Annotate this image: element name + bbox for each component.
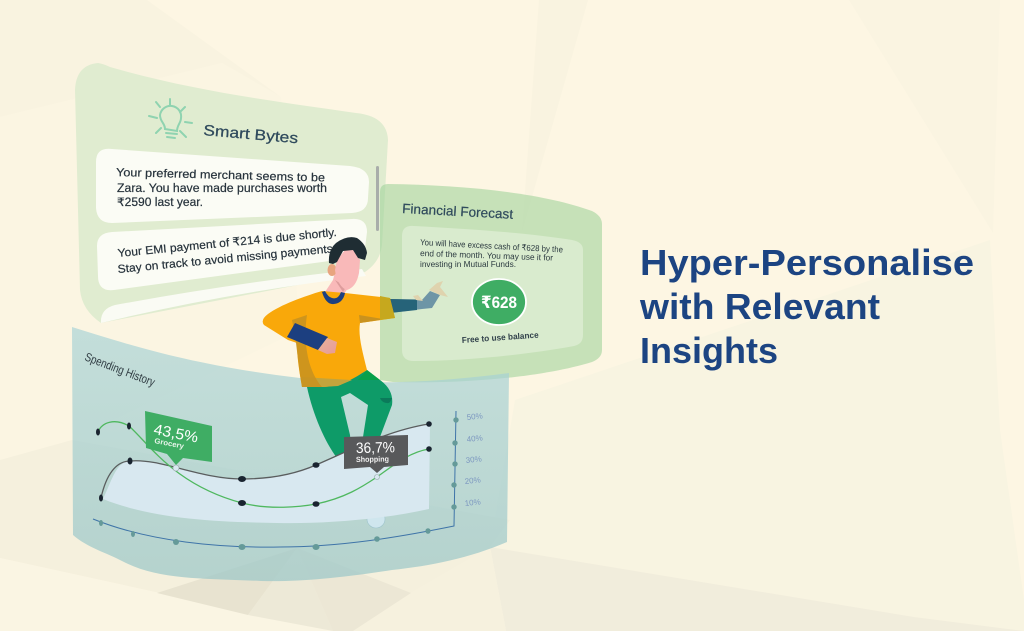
green line	[98, 422, 429, 507]
chart area	[103, 424, 430, 523]
left cuff	[287, 323, 328, 350]
axis labels: 50%	[466, 411, 483, 422]
title: Insights	[640, 330, 778, 371]
card: EMI payment	[97, 219, 367, 290]
heading: financial forecast: Financial Forecast	[402, 201, 514, 222]
axis labels: 10%	[464, 497, 481, 508]
sweater band under panel	[301, 377, 352, 387]
inner card: You will have excess cash of ₹628 by the	[420, 237, 563, 254]
icon: light bulb	[149, 99, 192, 138]
card: EMI payment: Stay on track to avoid missing payments	[117, 243, 334, 276]
character	[263, 237, 448, 458]
left hand	[318, 338, 337, 354]
callout: grocery: 43,5%	[152, 421, 200, 447]
inner card: investing in Mutual Funds.	[420, 259, 516, 269]
card: third partial	[101, 269, 366, 323]
scrollbar	[376, 166, 379, 231]
callout: grocery	[145, 411, 212, 465]
card: preferred merchant	[96, 149, 369, 223]
right sleeve	[390, 291, 440, 313]
small circle behind chart	[367, 510, 385, 528]
sweater shading	[292, 315, 322, 387]
title	[639, 242, 974, 371]
data points	[96, 421, 432, 507]
face	[335, 249, 360, 290]
balance badge	[472, 279, 526, 325]
callout: grocery: Grocery	[154, 436, 186, 451]
title: with Relevant	[639, 286, 880, 327]
card: preferred merchant: ₹2590 last year.	[117, 197, 203, 209]
dark line	[101, 424, 429, 498]
ear	[328, 264, 336, 276]
legs	[307, 370, 392, 458]
inner card: end of the month. You may use it for	[420, 248, 553, 263]
axes	[93, 411, 456, 547]
callout: shopping: Shopping	[356, 454, 389, 464]
axis labels: 20%	[464, 475, 481, 486]
title: Hyper-Personalise	[640, 242, 974, 283]
pointing hand	[413, 281, 448, 301]
collar	[322, 291, 345, 304]
axis labels: 40%	[466, 433, 483, 444]
chart: spending history	[83, 350, 483, 550]
panel: spending history	[72, 327, 509, 581]
card: preferred merchant: Your preferred merchant seems to be	[116, 167, 325, 184]
card: preferred merchant: Zara. You have made purchases worth	[117, 183, 327, 195]
panel: smart bytes	[75, 63, 388, 323]
hair	[329, 237, 367, 264]
sweater	[263, 291, 395, 387]
axis labels: 30%	[465, 454, 482, 465]
inner card	[402, 226, 583, 361]
callout: shopping	[344, 435, 408, 473]
heading: smart bytes: Smart Bytes	[203, 122, 299, 147]
card: EMI payment: Your EMI payment of ₹214 is due shortly.	[117, 227, 337, 260]
axis labels	[464, 411, 483, 508]
neck	[325, 272, 350, 294]
callout: shopping: 36,7%	[356, 439, 395, 457]
balance caption: Free to use balance	[461, 330, 539, 345]
balance badge: ₹628	[481, 293, 517, 312]
panel: financial forecast	[380, 184, 602, 382]
chart title: Spending History	[83, 350, 157, 389]
